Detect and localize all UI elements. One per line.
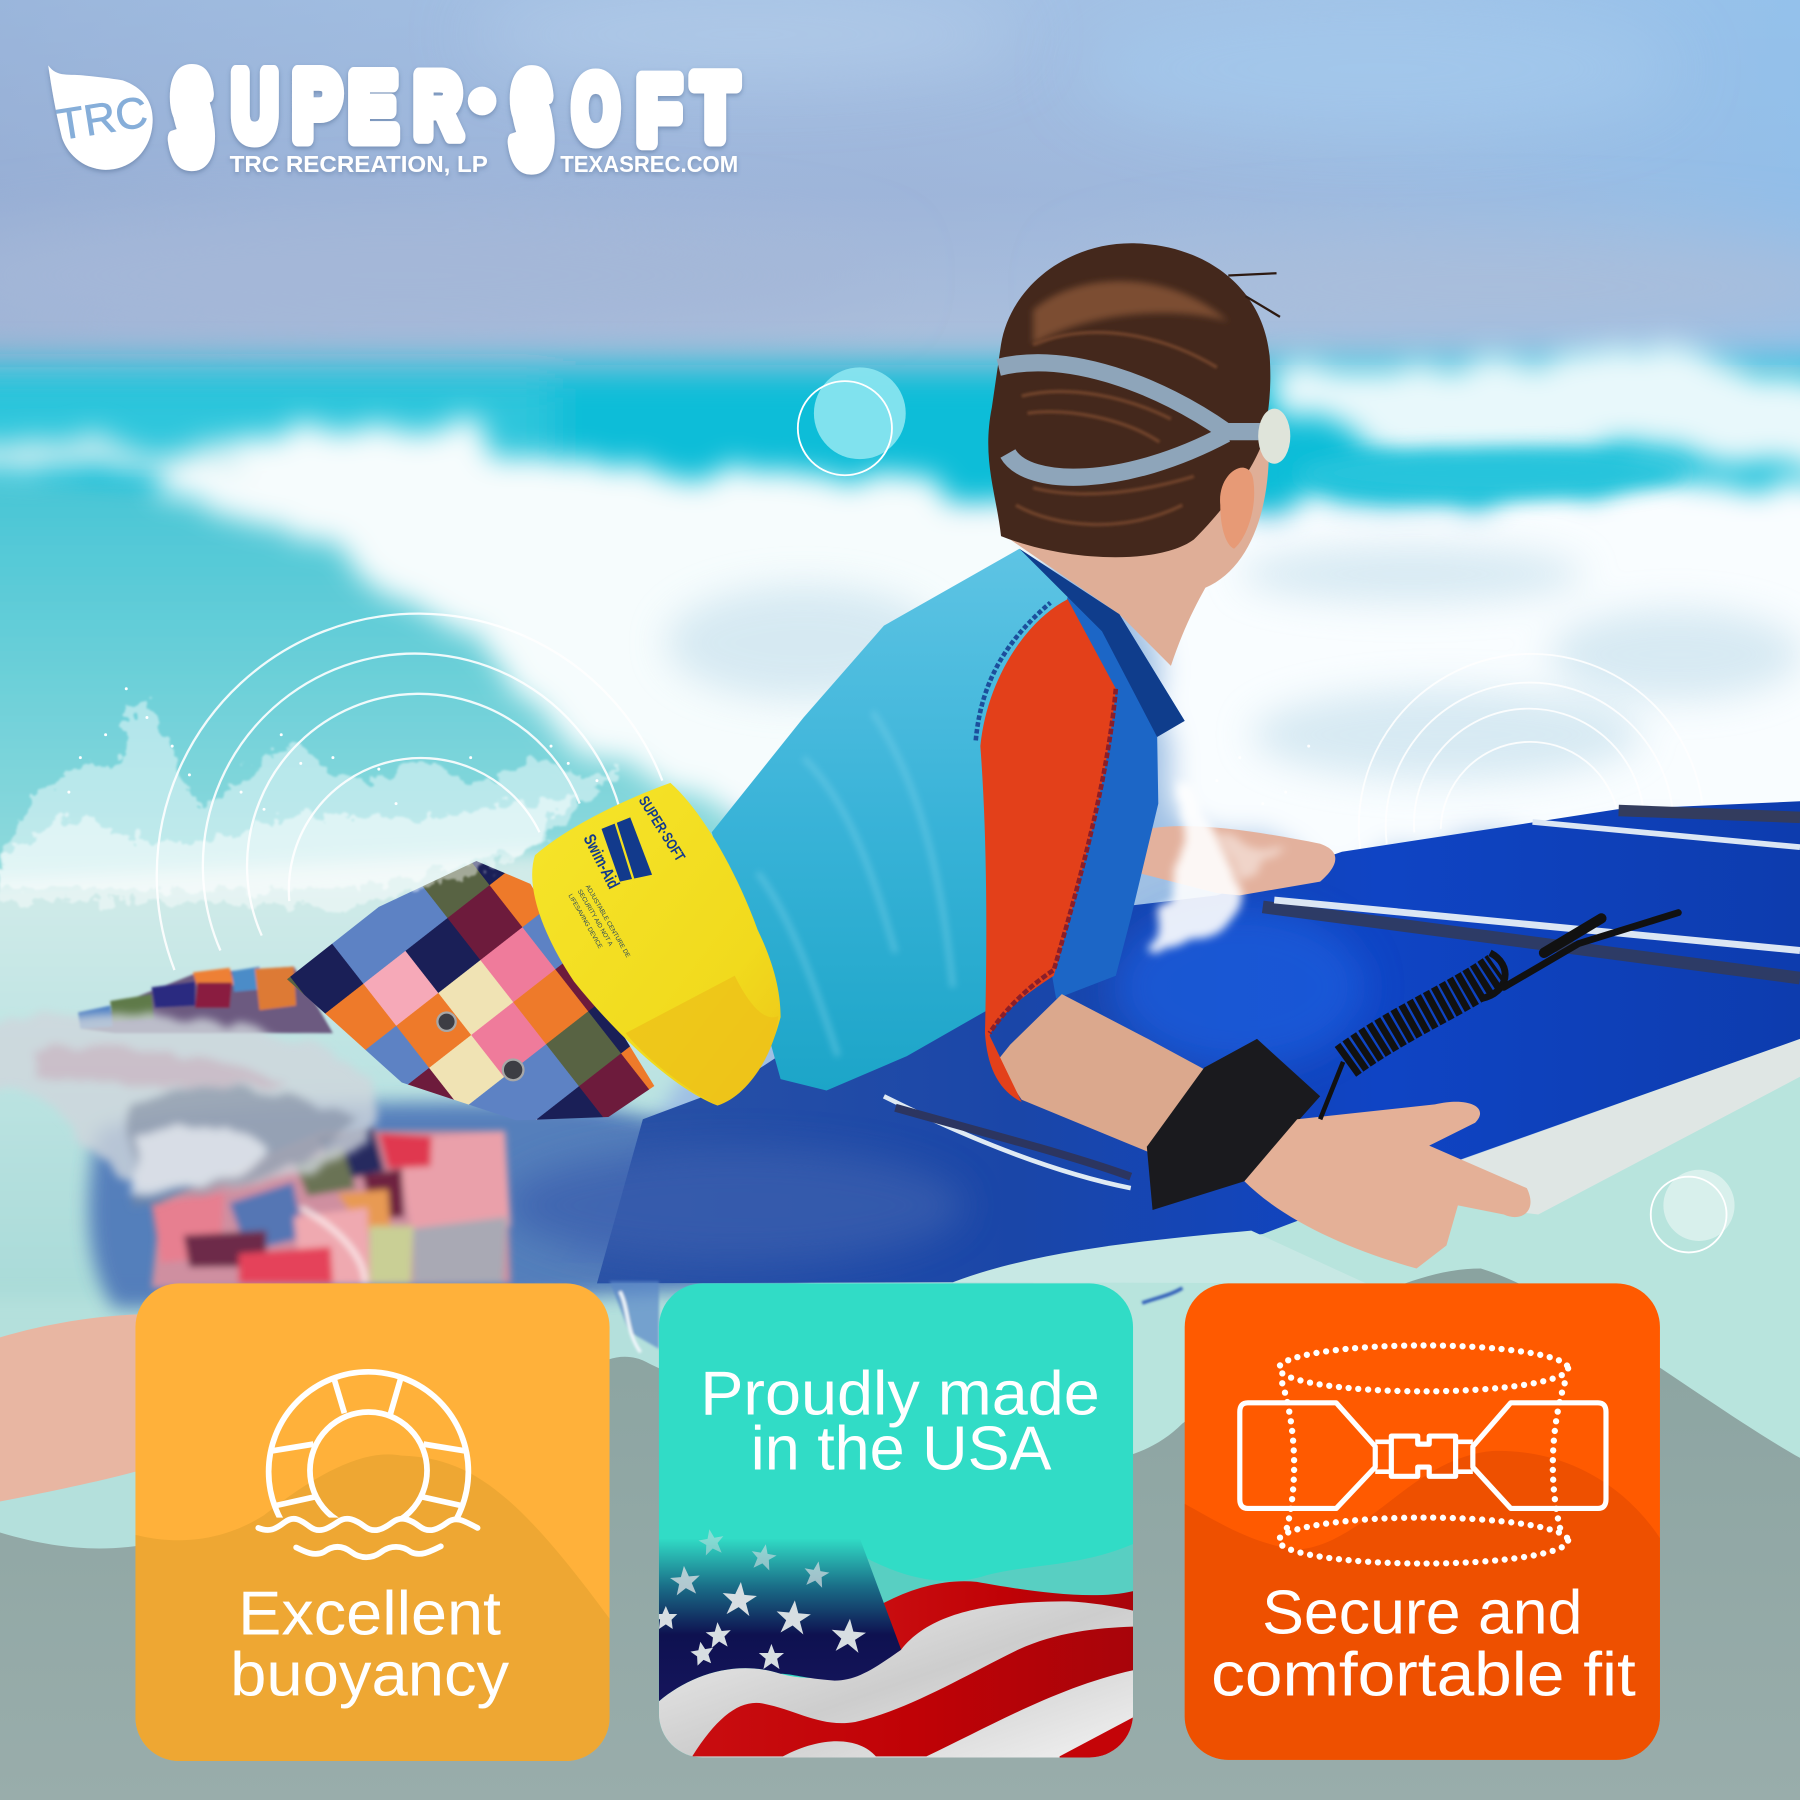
card: secure and comfortable fit: comfortable fit [1211, 1641, 1636, 1710]
churned water in front of shorts [0, 1013, 380, 1205]
card text: Proudly made [700, 1359, 1100, 1428]
logo wordmark [170, 45, 737, 193]
underwater blue around swimmer legs [89, 1102, 804, 1309]
background: foam shading [666, 545, 1800, 781]
card: excellent buoyancy: buoyancy [230, 1641, 509, 1710]
bodyboard [505, 801, 1800, 1283]
card lower wave shade [135, 1454, 610, 1761]
background: pale shallow water [0, 849, 1800, 1584]
logo wordmark: U [232, 53, 278, 160]
logo: TRC Super-Soft [48, 45, 738, 193]
plaid shorts [287, 861, 654, 1120]
splash by far hand [1148, 781, 1286, 951]
card: excellent buoyancy [135, 1283, 610, 1761]
logo droplet [48, 65, 153, 170]
trailing shorts [78, 967, 333, 1033]
boy: goggle lens [1258, 409, 1290, 464]
logo wordmark: F [637, 57, 681, 162]
card: made in the USA: in the USA [751, 1414, 1052, 1483]
shorts pocket grommets [437, 1012, 523, 1080]
boy: neck and face [1010, 436, 1269, 666]
swimmer foot at left edge [0, 1314, 143, 1502]
logo wordmark: S [170, 47, 214, 190]
background: left teal water [0, 471, 735, 918]
boy: collar [1019, 549, 1185, 737]
logo wordmark: T [693, 57, 737, 159]
shorts reflection under water [152, 1126, 511, 1288]
boy: shirt wrinkles [758, 712, 953, 1056]
logo wordmark: P [293, 53, 341, 160]
swim aid float: SECURITY AID NOT A [576, 888, 614, 948]
logo TRC letters: TRC [54, 88, 151, 150]
logo tagline: TRC RECREATION, LP [230, 151, 488, 177]
icon: life ring on waves [258, 1372, 478, 1572]
swim aid float: Swim-Aid [580, 831, 624, 892]
logo wordmark: O [573, 58, 619, 160]
background: sky [0, 0, 1800, 390]
boy: ear [1220, 468, 1254, 549]
decorative bubble: lower [1651, 1170, 1735, 1252]
waving american flag [654, 1527, 1133, 1768]
swim aid float: ADJUSTABLE CENTURE DE [584, 884, 631, 959]
logo S body blobs [165, 70, 561, 164]
flag stars [654, 1527, 867, 1669]
card text: Excellent [238, 1580, 501, 1649]
boy: shirt torso [712, 549, 1102, 1091]
boy: wrist strap [1147, 1039, 1320, 1210]
swim aid float: SUPER·SOFT [635, 793, 688, 865]
background: sea patch between foam bands [1297, 448, 1688, 498]
logo wordmark: R [414, 56, 461, 156]
board leash coil [1320, 913, 1678, 1119]
grey wave foreground [0, 1268, 1800, 1800]
far hand on the board [1136, 826, 1335, 895]
boy: sleeve stitching [976, 603, 1116, 1033]
card lower wave shade [1185, 1451, 1660, 1760]
boy: arm [996, 994, 1205, 1154]
water splash behind swimmer [0, 700, 620, 907]
decorative bubble: upper [798, 367, 906, 475]
background: white surf foam [0, 344, 1800, 884]
splash droplets [69, 689, 1309, 809]
card: made in the USA [654, 1283, 1133, 1768]
icon: adjustable belt with buckle [1240, 1345, 1606, 1564]
concentric rings: left [157, 614, 662, 970]
swim aid float: LIFESAVING DEVICE [567, 893, 603, 950]
blue water streaks between the cards [610, 1281, 1182, 1352]
logo wordmark: E [349, 54, 397, 159]
logo wordmark: S [510, 45, 553, 193]
boy: hand gripping board [1244, 1102, 1531, 1268]
boy: sleeve red [980, 599, 1116, 1102]
card: secure and comfortable fit [1185, 1283, 1660, 1760]
card text: Secure and [1262, 1579, 1582, 1648]
boy: goggle straps [999, 363, 1265, 477]
concentric rings: right [1359, 654, 1702, 849]
boy: sleeve blue [1022, 597, 1185, 999]
logo website: TEXASREC.COM [560, 151, 738, 177]
logo center dot [468, 87, 496, 115]
background: turquoise sea band [0, 365, 1800, 526]
boy: hair [988, 243, 1280, 557]
swim aid float [532, 783, 781, 1105]
